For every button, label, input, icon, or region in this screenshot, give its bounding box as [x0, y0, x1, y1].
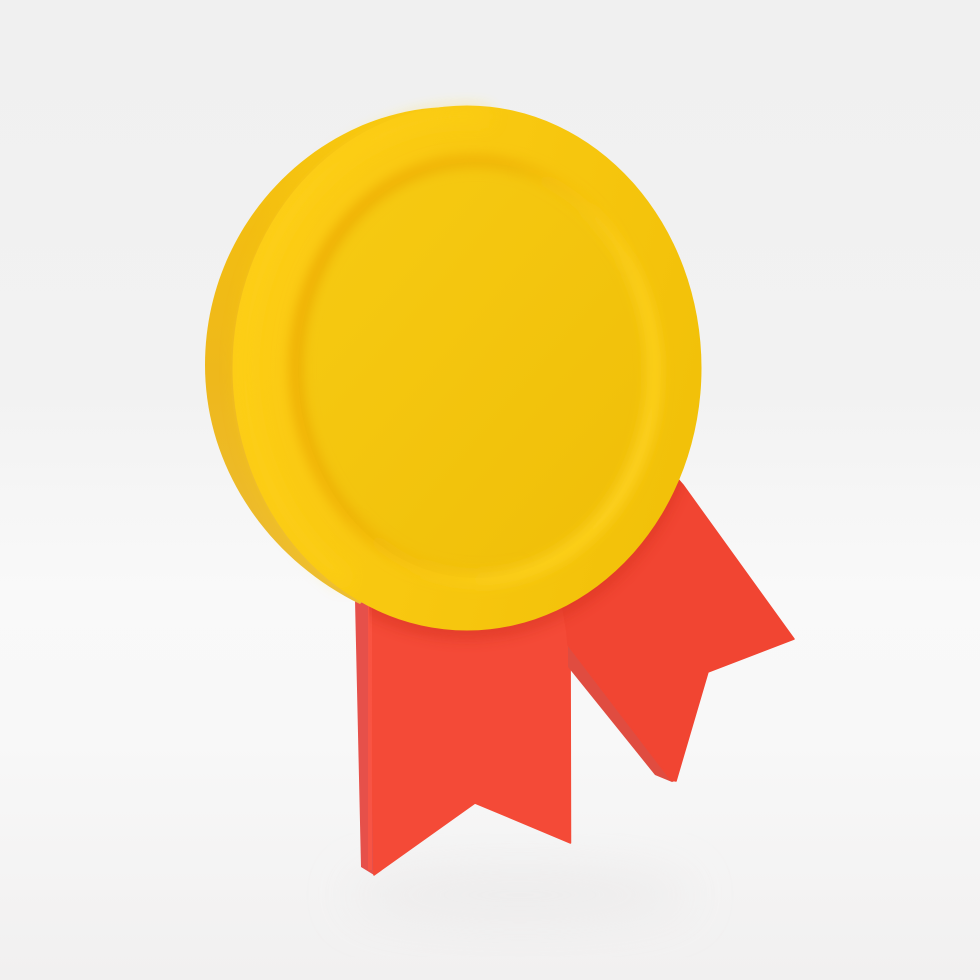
medal: coin edge: [205, 107, 470, 604]
ribbon: shadow under coin: [369, 480, 682, 640]
medal: groove highlight: [302, 165, 654, 579]
medal: inner disc: [298, 162, 654, 578]
ribbon: front left face: [369, 600, 570, 875]
medal: outer rim: [232, 106, 702, 630]
ribbon: front left side strip: [355, 600, 374, 875]
ribbon: back right side strip: [568, 640, 675, 782]
ribbon: front left: [355, 600, 570, 875]
illustration: 3D gold medal with red ribbons: [205, 95, 795, 876]
ribbon: front left fold highlight: [368, 605, 372, 870]
medal: groove shadow: [296, 161, 652, 575]
ribbon: back right: [560, 470, 794, 782]
medal: left rim glow: [245, 116, 689, 620]
medal: coin face: [232, 106, 702, 630]
ribbon: back right face: [560, 470, 794, 781]
